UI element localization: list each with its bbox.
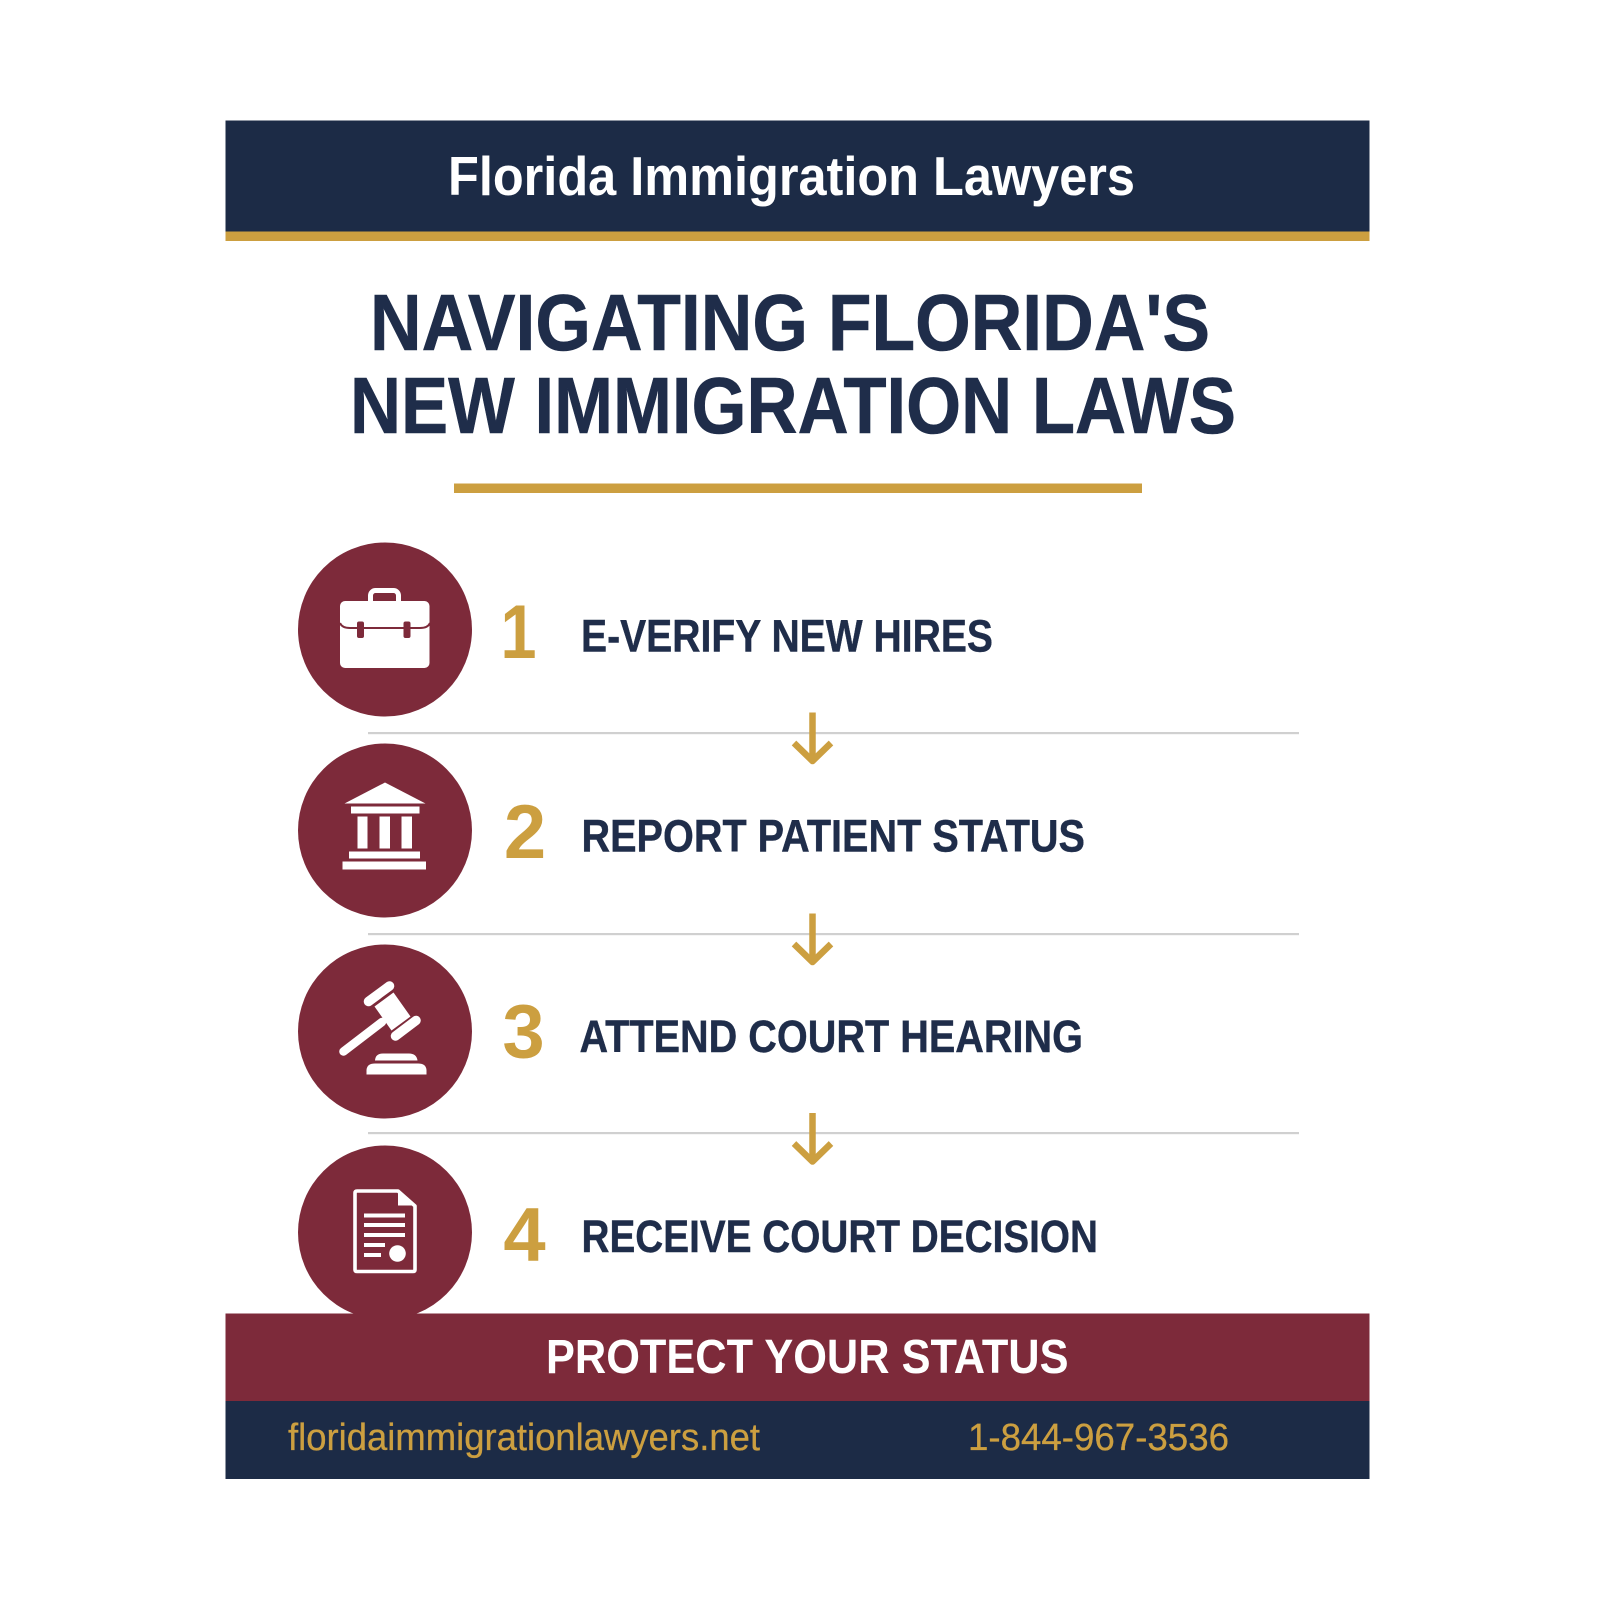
step 4 xyxy=(298,1146,1098,1320)
step 2 label: REPORT PATIENT STATUS xyxy=(582,811,1085,862)
step 1 xyxy=(298,542,993,716)
call to action band xyxy=(226,1314,1370,1401)
step 1 number: 1 xyxy=(500,590,536,675)
step 4 number: 4 xyxy=(503,1192,546,1278)
step 3 xyxy=(298,944,1083,1118)
call to action text: PROTECT YOUR STATUS xyxy=(546,1331,1068,1384)
arrow 3 xyxy=(794,1113,831,1162)
icon: courthouse xyxy=(342,782,426,870)
step 4 circle xyxy=(298,1146,472,1320)
arrow 2 xyxy=(794,914,831,962)
step 3 number: 3 xyxy=(502,990,545,1074)
step 3 circle xyxy=(298,944,472,1118)
icon: gavel xyxy=(344,986,426,1074)
step 3 label: ATTEND COURT HEARING xyxy=(580,1011,1083,1062)
row divider 1 xyxy=(368,732,1299,734)
header title: Florida Immigration Lawyers xyxy=(448,145,1135,207)
heading underline xyxy=(454,484,1142,493)
main heading xyxy=(350,278,1236,450)
phone number: 1-844-967-3536 xyxy=(968,1417,1229,1459)
row divider 2 xyxy=(368,933,1299,935)
step 4 label: RECEIVE COURT DECISION xyxy=(582,1211,1098,1262)
website: floridaimmigrationlawyers.net xyxy=(288,1417,760,1459)
step 1 label: E-VERIFY NEW HIRES xyxy=(581,611,993,662)
main heading: NEW IMMIGRATION LAWS xyxy=(350,361,1236,450)
icon: briefcase xyxy=(340,590,430,668)
arrow 1 xyxy=(794,712,831,761)
contact band xyxy=(226,1401,1370,1479)
step 1 circle xyxy=(298,542,472,716)
main heading: NAVIGATING FLORIDA'S xyxy=(370,278,1210,367)
header band xyxy=(226,120,1370,241)
icon: document xyxy=(355,1191,415,1272)
row divider 3 xyxy=(368,1132,1299,1134)
step 2 circle xyxy=(298,744,472,918)
step 2 number: 2 xyxy=(504,790,546,875)
step 2 xyxy=(298,744,1085,918)
